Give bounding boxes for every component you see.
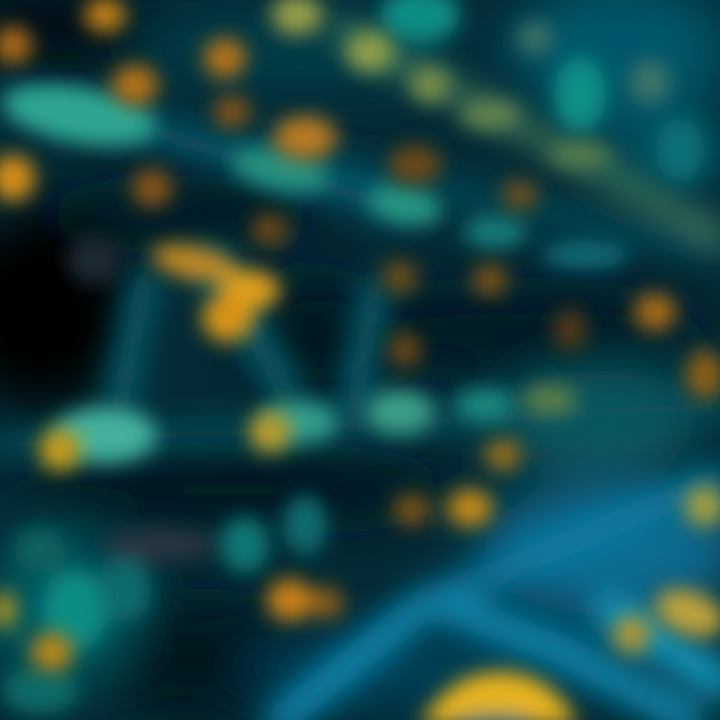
olive diagonal nodes (271, 0, 670, 415)
yellow lower-right nodes (420, 485, 720, 720)
central amber bracket (148, 237, 280, 342)
